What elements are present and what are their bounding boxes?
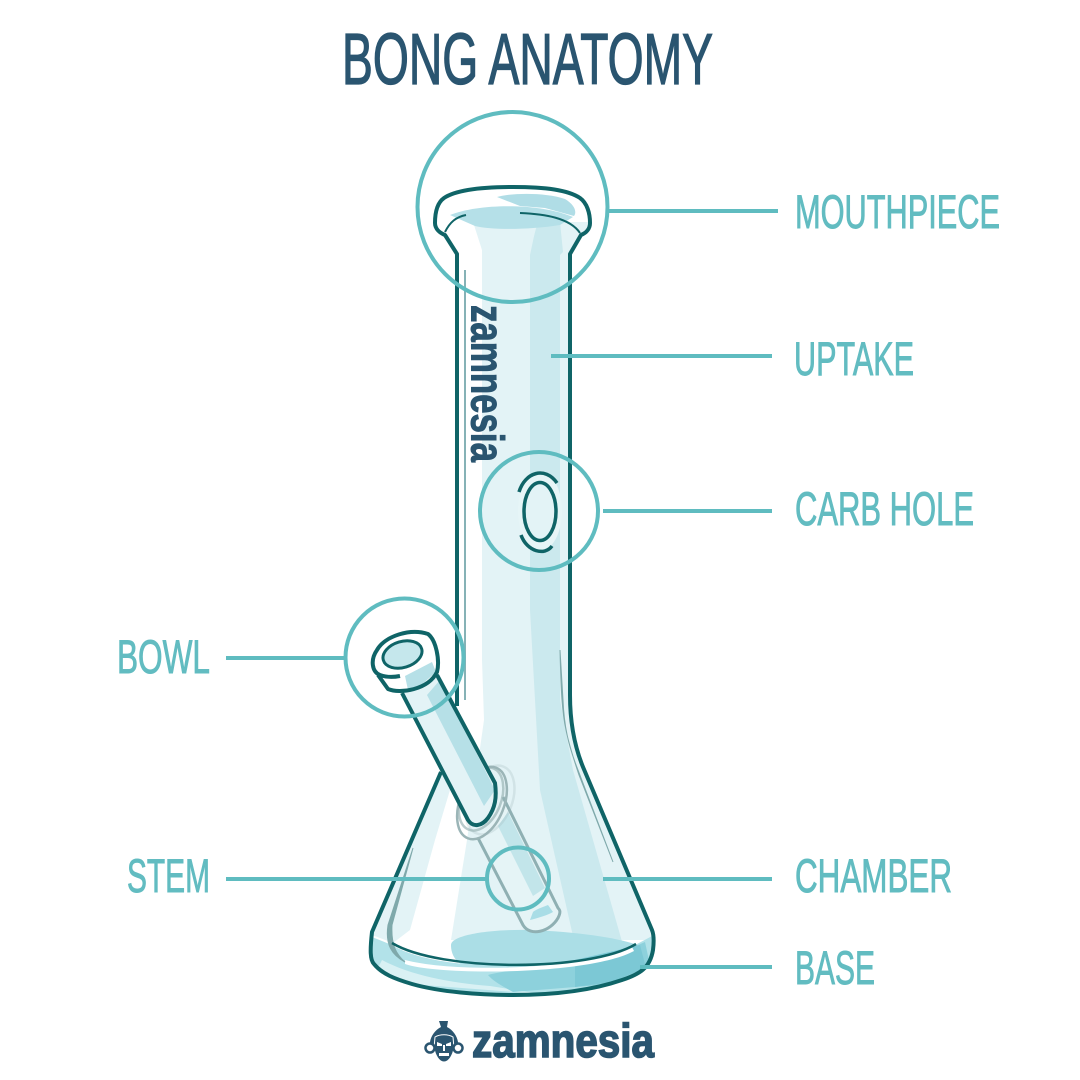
glass inner reflection lines [464,270,466,700]
stem grommet [447,758,524,846]
bowl [373,632,438,691]
label: chamber: CHAMBER [795,849,952,902]
label: stem: STEM [127,849,210,902]
callout: bowl [226,598,464,716]
callout: carb hole [480,452,772,570]
glass body fill [360,180,660,1000]
label: carb hole: CARB HOLE [795,482,974,535]
label: bowl: BOWL [117,630,210,683]
callout: base [640,965,772,969]
footer logo [426,1014,655,1067]
glass outline [371,187,654,995]
title: BONG ANATOMY [342,20,713,100]
callout: chamber [603,877,772,881]
stem inside chamber [478,797,560,932]
carb hole [518,471,562,551]
callout: mouthpiece [418,112,778,302]
icon: tribal mask [426,1021,462,1062]
callout: stem [226,848,549,910]
label: base: BASE [795,941,875,994]
callout: uptake [551,354,772,358]
stem upper [402,675,496,825]
callout circles and leader lines [226,112,778,967]
wordmark: zamnesia: zamnesia [472,1014,655,1067]
label: uptake: UPTAKE [794,332,914,385]
wordmark on glass: zamnesia [462,305,514,462]
bong illustration [360,180,660,1000]
